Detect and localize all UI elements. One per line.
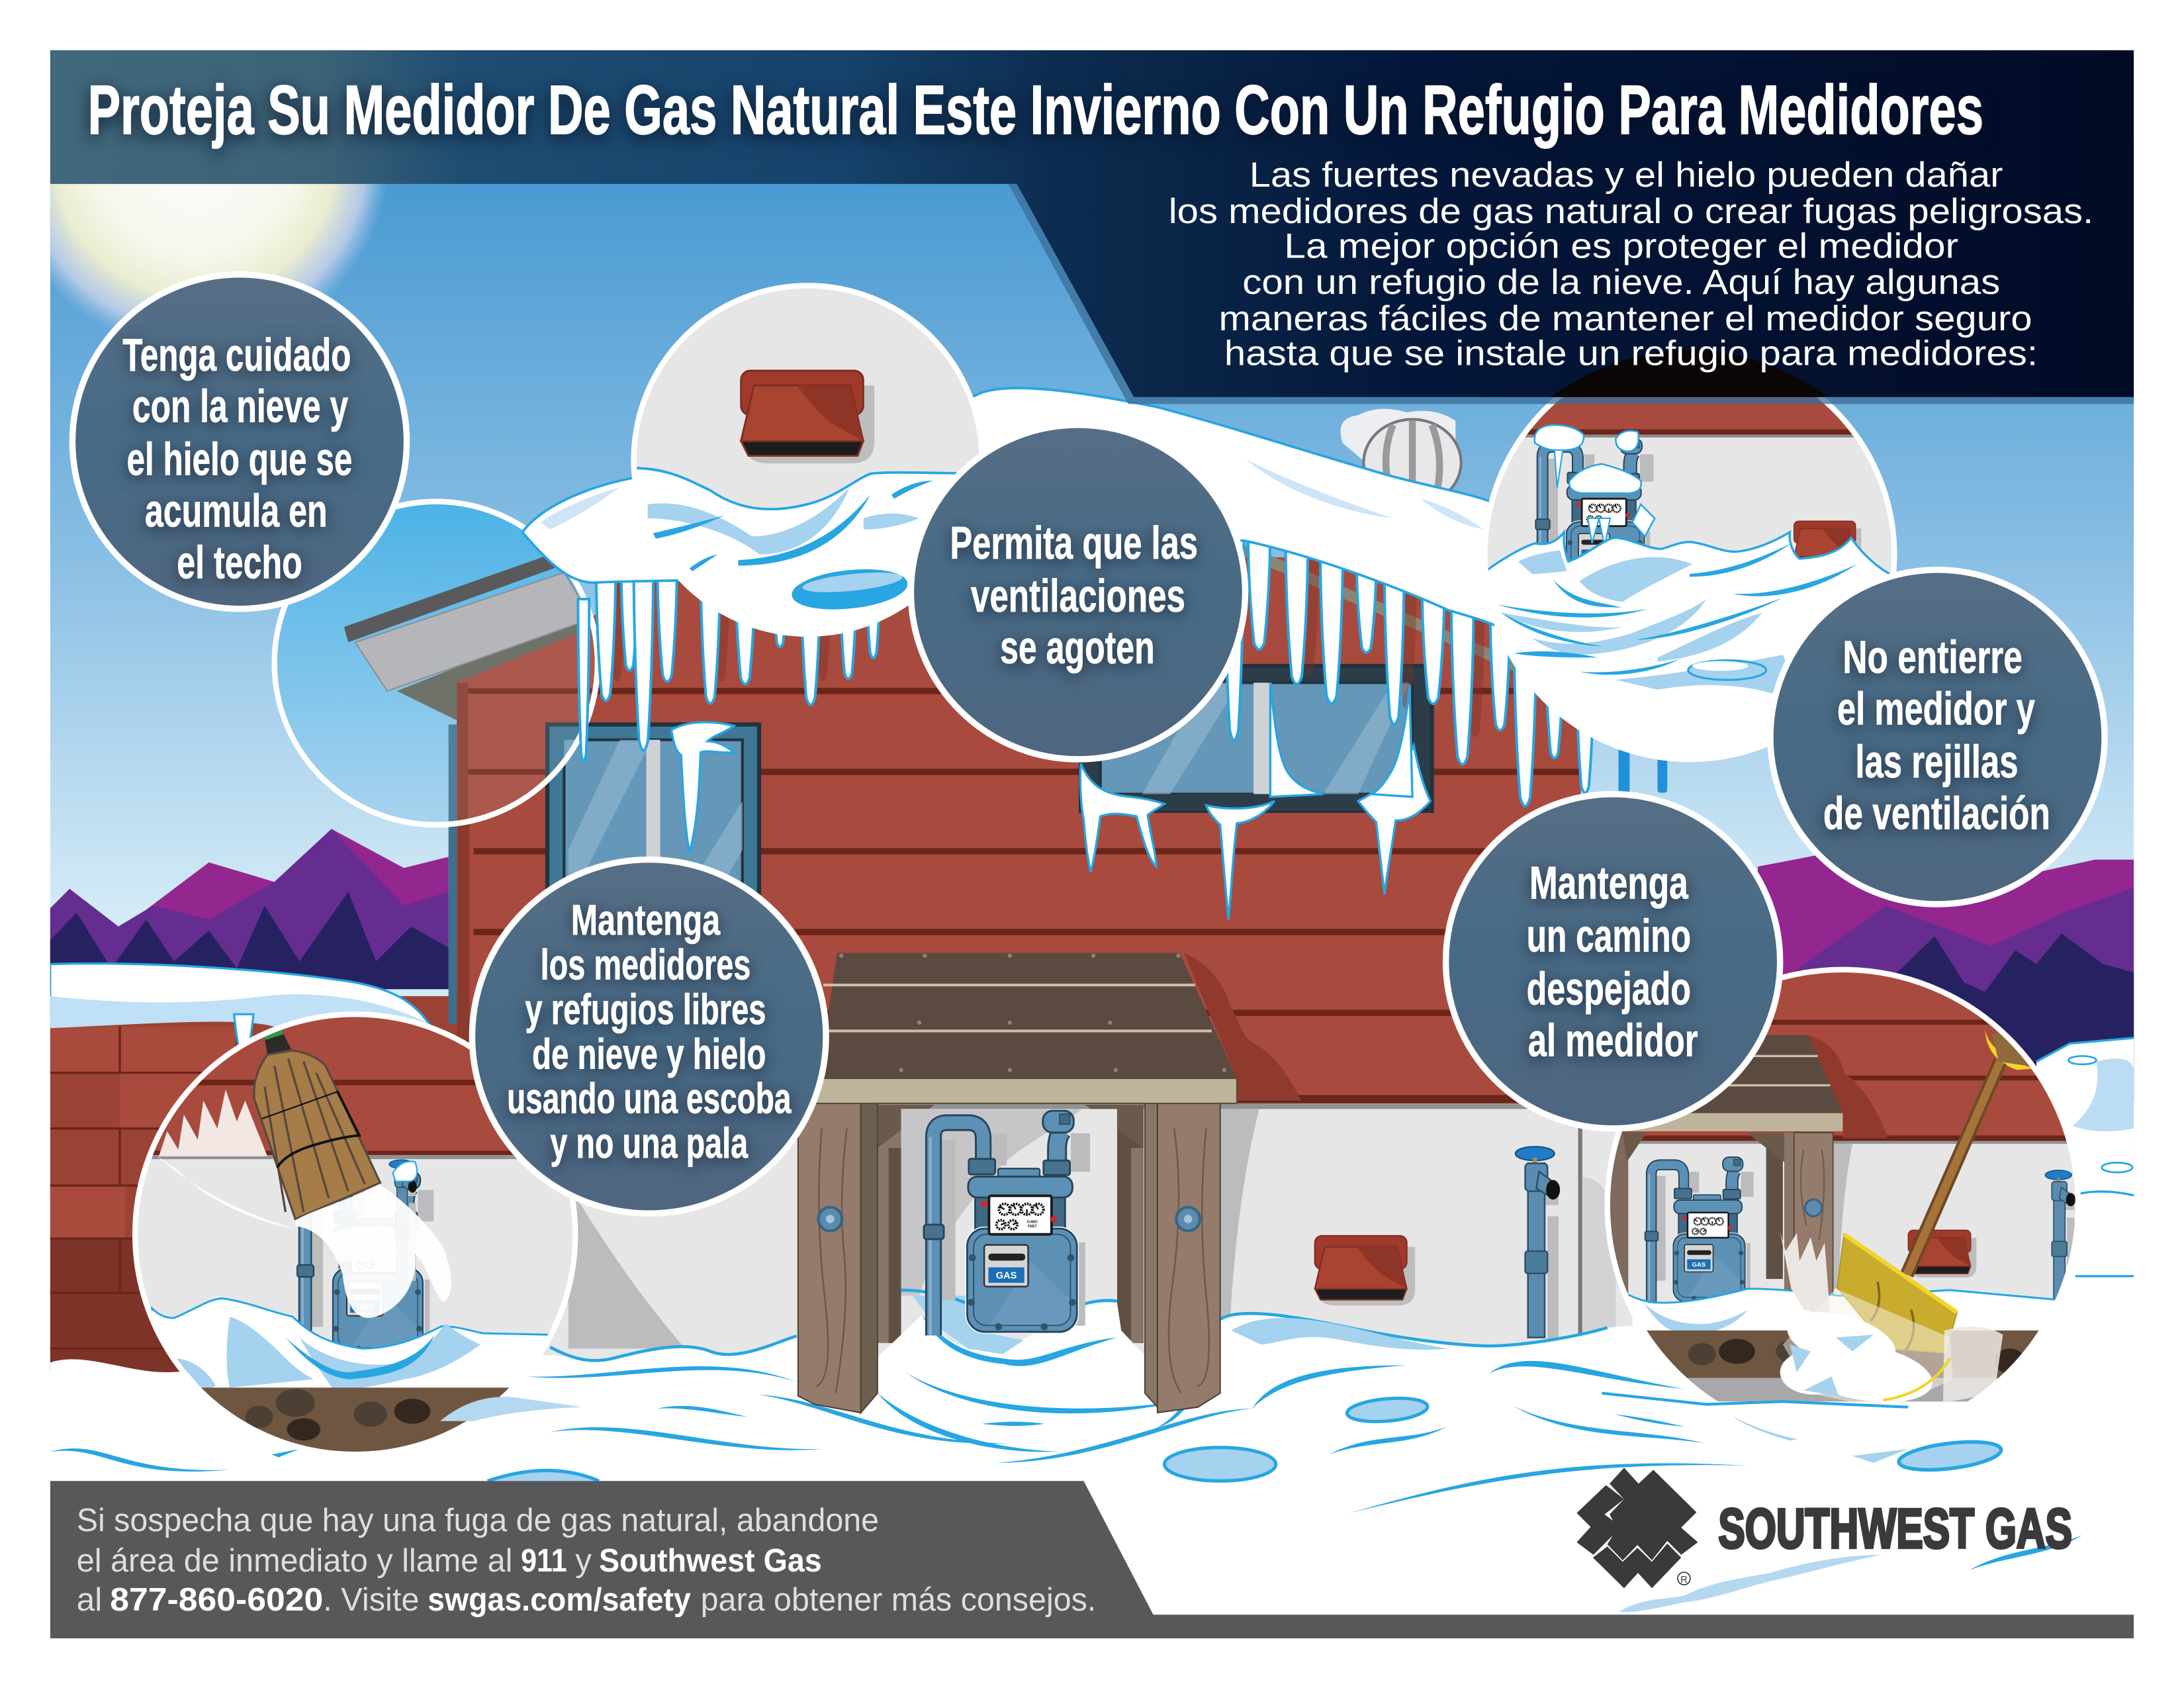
footer text: . Visite: [323, 1581, 419, 1618]
detail circle: vent with snow: [634, 285, 989, 641]
house siding: [449, 557, 1581, 1103]
footer text: Si sospecha que hay una fuga de gas natural, abandone: [77, 1502, 879, 1538]
footer text: [77, 1502, 1096, 1618]
detail circle: shovel: [1602, 961, 2089, 1449]
left window: [545, 722, 761, 896]
window ice: [671, 682, 1430, 919]
gas meter, main: FEET: [1028, 1225, 1037, 1229]
detail circle: broom: [125, 1010, 585, 1463]
header band shadow: [1009, 184, 2134, 404]
meter shelter front posts and roof: [798, 953, 1237, 1413]
intro text: con un refugio de la nieve. Aquí hay algunas: [1242, 263, 2000, 302]
bubble: vents: Permita que las: [950, 517, 1198, 569]
wall vent: [1315, 1236, 1415, 1305]
bubble: roof snow: Tenga cuidado: [122, 329, 351, 381]
intro text: hasta que se instale un refugio para medidores:: [1224, 334, 2038, 373]
bubble: broom advice: y refugios libres: [525, 985, 766, 1033]
bubble: do not bury: de ventilación: [1823, 787, 2050, 839]
bubble: do not bury: el medidor y: [1837, 682, 2035, 734]
footer panel: [50, 1481, 2134, 1638]
footer text: para obtener más consejos.: [701, 1581, 1096, 1618]
right mound snow: [2036, 1038, 2134, 1407]
gutter under roof: [1245, 545, 1513, 671]
intro text: [1169, 156, 2093, 373]
bubble: broom advice: los medidores: [541, 941, 751, 989]
bubble: roof snow: el techo: [177, 536, 302, 588]
sun: [50, 50, 385, 328]
intro text: los medidores de gas natural o crear fugas peligrosas.: [1169, 192, 2093, 231]
detail circle: broom: GAS: [356, 1302, 373, 1311]
bubble: vents: se agoten: [1000, 622, 1155, 673]
bubble: clear path: [1446, 794, 1780, 1129]
right window: [1081, 666, 1432, 811]
bubble: do not bury: [1770, 570, 2105, 904]
Southwest Gas logo: R: [1680, 1575, 1688, 1585]
footer text: al: [77, 1581, 102, 1618]
bubble: broom advice: Mantenga: [571, 896, 721, 944]
bubble: do not bury: No entierre: [1843, 632, 2023, 683]
icicles left group: [578, 564, 880, 762]
dark arc of meter circle over header: [1550, 350, 1829, 397]
gas meter, main: GAS: [996, 1271, 1017, 1282]
detail circle: shovel: GAS: [1692, 1261, 1706, 1268]
bubble: do not bury: las rejillas: [1855, 735, 2019, 787]
bubble: roof snow: acumula en: [145, 485, 328, 537]
detail circle: roof corner: [275, 502, 606, 837]
bubble: clear path: despejado: [1527, 962, 1691, 1014]
bubble: vents: ventilaciones: [971, 570, 1185, 622]
bubble: roof snow: el hielo que se: [127, 434, 352, 485]
bubble: broom advice: [472, 860, 826, 1213]
mountains left: [50, 829, 449, 989]
bubble: roof snow: [72, 275, 407, 609]
brick wall snow: [50, 964, 432, 1062]
icicle shadows: [609, 557, 1484, 737]
roof snow: [522, 388, 1602, 724]
footer text: el área de inmediato y llame al: [77, 1542, 512, 1579]
meter shelter back structure: [878, 1105, 1144, 1353]
bubble: clear path: Mantenga: [1529, 857, 1689, 909]
bubble: roof snow: con la nieve y: [132, 381, 348, 432]
ground snow: [50, 1288, 2082, 1613]
icicles right group: [1224, 527, 1594, 806]
detail circle: buried meter: GAS: [1587, 552, 1602, 559]
water faucet: [1516, 1147, 1560, 1342]
foundation wall: [518, 1103, 1633, 1361]
intro text: Las fuertes nevadas y el hielo pueden dañar: [1250, 156, 2003, 195]
bubble: broom advice: usando una escoba: [507, 1074, 792, 1123]
footer text: swgas.com/safety: [428, 1581, 691, 1618]
mountains right: [1758, 854, 2134, 1101]
bubble: broom advice: de nieve y hielo: [532, 1029, 766, 1078]
detail circle: buried meter: [1477, 348, 1908, 767]
intro text: La mejor opción es proteger el medidor: [1284, 226, 1958, 265]
bubble: clear path: al medidor: [1528, 1014, 1698, 1066]
sky: [50, 139, 2134, 996]
bubble: vents: [911, 425, 1246, 759]
footer text: Southwest Gas: [599, 1542, 822, 1579]
Southwest Gas logo: [1576, 1468, 2072, 1588]
bubble: clear path: un camino: [1527, 910, 1691, 961]
intro text: maneras fáciles de mantener el medidor seguro: [1219, 299, 2032, 338]
bubble: broom advice: y no una pala: [550, 1119, 749, 1167]
footer text: 911: [521, 1542, 567, 1579]
header panel: [50, 50, 2134, 397]
brick wall: [50, 996, 457, 1372]
footer text: y: [575, 1542, 592, 1579]
gas meter, main: [924, 1111, 1090, 1335]
turbine roof vent: [1341, 409, 1461, 506]
blue icicles behind: [1619, 731, 1667, 793]
footer text: 877-860-6020: [110, 1581, 323, 1618]
gas meter, main: CUBIC: [1026, 1221, 1038, 1225]
roof shadow on siding: [1184, 953, 1301, 1101]
